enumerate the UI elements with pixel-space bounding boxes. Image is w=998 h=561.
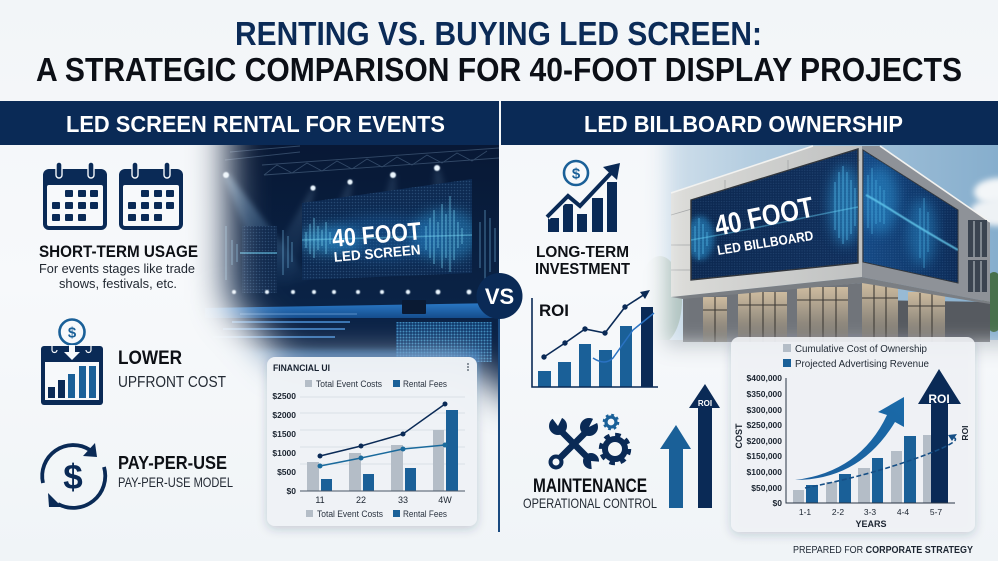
led screen: side panel [242,226,277,293]
truss rig [225,146,499,175]
text block: short-term usage: For events stages like trade [39,261,195,276]
stage floor [210,303,492,318]
panel: building photo [654,145,998,356]
x axis labels: 4W [438,495,452,505]
chart: roi mini chart: ROI [539,301,569,320]
stage steps [213,314,357,337]
arrow: navy roi large: ROI [928,392,950,406]
centre divider [498,318,500,532]
arrow: navy roi up [689,384,720,508]
header band: rental [0,101,499,145]
screen text: LED SCREEN [333,241,421,265]
y axis labels [747,373,782,508]
icon: calendars [43,162,183,230]
legend: Projected Advertising Revenue [795,359,929,370]
text block: pay-per-use: PAY-PER-USE [118,453,227,473]
y axis labels: $1500 [272,429,296,439]
legend [783,344,929,370]
y axis labels: $400,000 [747,373,782,383]
x axis labels: 2-2 [832,507,844,517]
blue bars [321,410,458,491]
header band: ownership: LED BILLBOARD OWNERSHIP [584,111,903,137]
billboard text: LED BILLBOARD [716,228,814,258]
text block: lower upfront cost: LOWER [118,348,182,369]
building upper walls [671,146,862,297]
arrow: dashed trend [805,434,957,488]
building ground floor [898,300,990,342]
panel: financial chart card [267,357,477,526]
legend: Cumulative Cost of Ownership [795,344,927,355]
icon: wrench two [550,415,601,468]
top legend [305,379,447,389]
y axis labels: $350,000 [747,389,782,399]
side windows [968,220,987,257]
roi axis title: ROI [960,425,970,441]
icon: small gear [604,415,618,429]
x axis labels: 4-4 [897,507,909,517]
bottom legend: Rental Fees [403,509,447,519]
led screen: main [298,179,479,280]
y axis labels: $0 [773,498,782,508]
panel: stage photo [196,145,499,422]
text block: short-term usage: SHORT-TERM USAGE [39,242,198,261]
text block: lower upfront cost: UPFRONT COST [118,374,226,391]
spotlight beams [224,170,444,280]
y axis labels: $1000 [272,448,296,458]
text block: lower upfront cost [118,348,226,391]
arrow: navy roi up: ROI [698,399,712,408]
card heading: FINANCIAL UI [273,363,330,373]
y axis labels: $150,000 [747,451,782,461]
icon: pay-per-use cycle: $ [63,458,83,497]
y axis labels: $2500 [272,391,296,401]
years axis title: YEARS [855,519,887,529]
icon: pay-per-use cycle [42,443,105,508]
arrow: blue up [660,425,691,508]
text block: short-term usage [39,242,198,291]
stage lights [223,165,471,294]
icon: lower upfront cost [41,320,103,405]
y axis labels: $250,000 [747,420,782,430]
top legend: Total Event Costs [316,379,382,389]
top legend: Rental Fees [403,379,447,389]
header band: rental: LED SCREEN RENTAL FOR EVENTS [66,111,445,137]
line series dark [318,402,448,458]
y axis labels: $200,000 [747,436,782,446]
icon: long-term investment growth [547,161,620,232]
title [36,15,962,88]
side wave bars [226,210,495,280]
y axis labels: $100,000 [747,467,782,477]
y axis labels [272,391,296,496]
icon: calendar two [119,162,183,230]
icon: calendar one [43,162,107,230]
bottom legend [306,509,447,519]
x axis labels: 22 [356,495,366,505]
billboard right face [862,150,958,283]
blue bars [806,436,916,503]
icon: wrench one [549,414,603,473]
screen text [332,222,420,262]
text block: maintenance: MAINTENANCE [533,476,647,497]
header band: ownership [501,101,998,145]
y axis labels: $50,000 [751,483,782,493]
bottom legend: Total Event Costs [317,509,383,519]
footer note: PREPARED FOR CORPORATE STRATEGY [793,545,973,556]
x axis labels: 33 [398,495,408,505]
billboard text: 40 FOOT [712,192,817,243]
icon: maintenance tools [549,414,629,473]
x axis labels: 5-7 [930,507,942,517]
x axis labels: 1-1 [799,507,811,517]
x axis labels: 3-3 [864,507,876,517]
icon: long-term investment growth: $ [572,166,581,182]
trees [656,256,682,340]
vs badge [476,273,522,319]
cost axis title: COST [734,423,744,449]
text block: short-term usage: shows, festivals, etc. [59,276,177,291]
text block: pay-per-use [118,453,233,490]
vs badge: VS [485,284,514,309]
text block: long-term investment [535,244,630,278]
title: RENTING VS. BUYING LED SCREEN: [235,15,762,52]
chart: roi mini chart [532,290,658,387]
icon: lower upfront cost: $ [68,324,77,342]
text block: maintenance: OPERATIONAL CONTROL [523,495,657,511]
text block: maintenance [523,476,657,511]
panel: ownership chart card [731,337,975,532]
y axis labels: $500 [277,467,296,477]
y axis labels: $2000 [272,410,296,420]
x axis labels: 11 [315,495,325,505]
y axis labels: $300,000 [747,405,782,415]
billboard left face [686,149,861,280]
led floor box [396,322,492,362]
arrow: blue swoosh [795,397,904,480]
x axis labels [799,507,942,517]
text block: long-term investment: LONG-TERM [536,244,629,261]
arrow: navy roi large [918,369,961,503]
y axis labels: $0 [287,486,296,496]
line series blue [318,442,448,468]
grey bars [793,435,933,503]
text block: long-term investment: INVESTMENT [535,261,630,278]
grey bars [307,430,444,491]
icon: large gear [601,435,629,463]
text block: pay-per-use: PAY-PER-USE MODEL [118,474,233,490]
billboard text [716,196,813,255]
x axis labels [315,495,452,505]
screen text: 40 FOOT [331,217,422,253]
